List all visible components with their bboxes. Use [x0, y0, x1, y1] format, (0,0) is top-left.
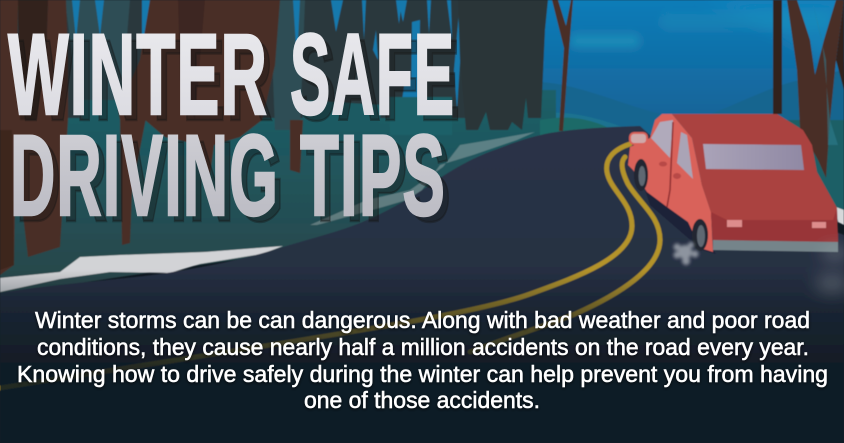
right tree trunks — [773, 0, 844, 178]
intro paragraph: one of those accidents. — [304, 387, 540, 413]
car side body — [628, 114, 713, 252]
side windows — [651, 120, 673, 158]
double yellow road lines — [0, 144, 660, 388]
sky slivers — [18, 0, 464, 120]
snow banks — [0, 132, 844, 292]
clouds — [570, 12, 830, 48]
road — [0, 126, 844, 443]
left tree trunks — [0, 0, 303, 275]
thin Y tree — [552, 0, 573, 131]
forest canopy — [0, 0, 470, 135]
car rear body — [672, 114, 838, 242]
front wheel — [634, 159, 648, 191]
title line 2: DRIVING — [10, 112, 279, 240]
tail lights — [727, 220, 742, 227]
tyre spray — [674, 242, 698, 265]
ground — [0, 90, 556, 295]
car rear panel — [711, 208, 838, 242]
title line 1: WINTER — [8, 11, 268, 139]
sky — [0, 0, 844, 140]
title shadow: SAFE — [296, 17, 461, 145]
title shadow: WINTER — [14, 17, 274, 145]
rear window — [703, 144, 804, 170]
title shadow — [14, 17, 461, 246]
distant hills — [535, 70, 844, 210]
dark foliage mass — [458, 0, 548, 130]
title shadow: TIPS — [306, 118, 452, 246]
side mirror — [630, 133, 647, 144]
car shadow — [645, 190, 716, 254]
car — [628, 114, 838, 254]
title line 2: TIPS — [300, 112, 446, 240]
intro paragraph: conditions, they cause nearly half a million accidents on the road every year. — [37, 334, 809, 360]
title line 1: SAFE — [290, 11, 455, 139]
intro paragraph: Knowing how to drive safely during the winter can help prevent you from having — [17, 361, 828, 387]
rear wheel — [692, 219, 708, 251]
bottom fade overlay — [0, 270, 844, 443]
exhaust smoke — [816, 246, 844, 295]
title shadow: DRIVING — [16, 118, 285, 246]
intro paragraph — [17, 307, 828, 413]
title — [8, 11, 461, 246]
intro paragraph: Winter storms can be can dangerous. Along with bad weather and poor road — [35, 307, 810, 333]
door handles — [659, 162, 667, 166]
door line — [667, 122, 673, 207]
bumper — [713, 240, 838, 252]
